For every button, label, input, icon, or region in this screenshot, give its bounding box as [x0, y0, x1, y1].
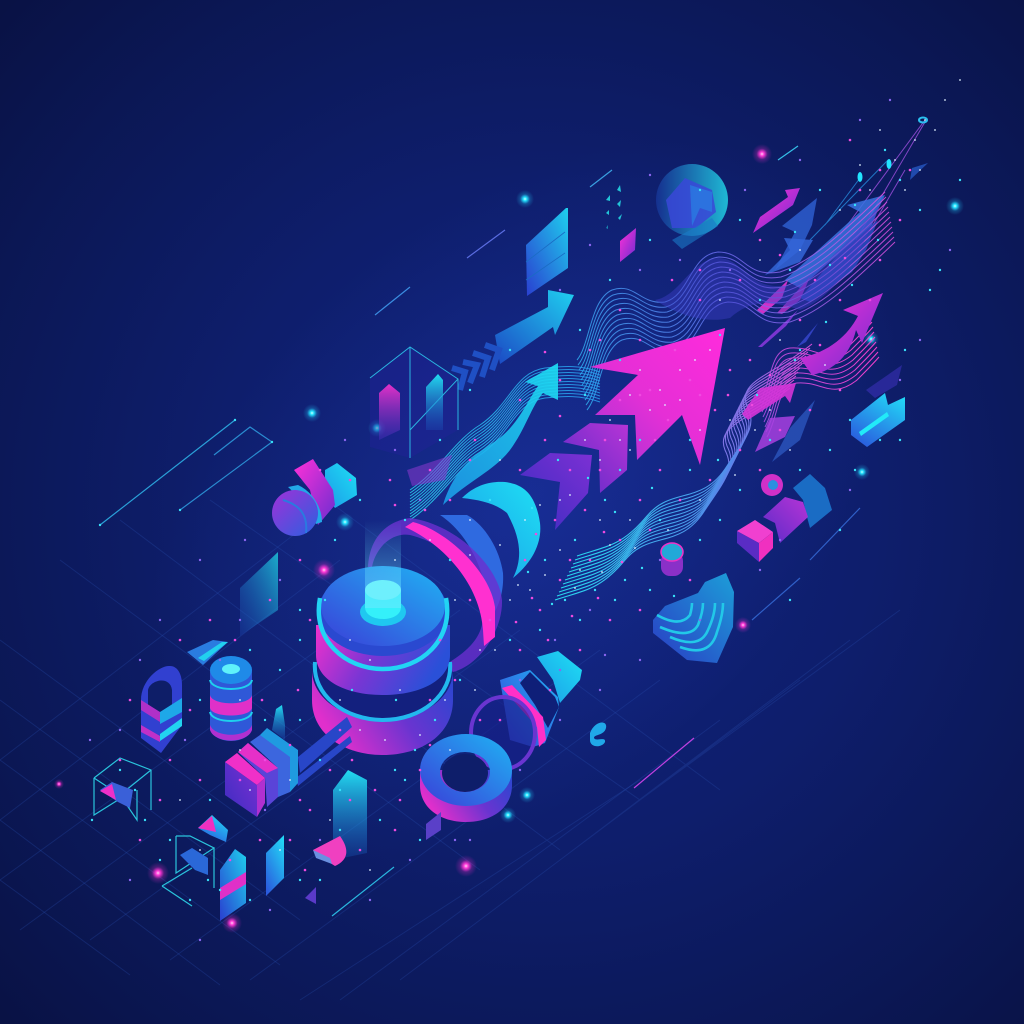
- hex sphere: [656, 164, 728, 249]
- wave: lower ribbon: [555, 344, 812, 600]
- wire cube left: [94, 758, 151, 820]
- pink band: [405, 522, 495, 646]
- cyan segment: [462, 482, 540, 578]
- wave: pink ribbon: [760, 322, 879, 437]
- arrow: large pink: [590, 328, 725, 465]
- donut: [420, 734, 512, 822]
- arrow: cyan large: [452, 290, 574, 390]
- wheel: rear segments: [368, 482, 540, 672]
- chevron: rear: [520, 453, 592, 530]
- stacked data cylinder: [312, 520, 453, 755]
- third layer: [250, 735, 290, 797]
- wave: left ribbon: [410, 367, 600, 520]
- barrel small: [661, 543, 683, 576]
- back layer: [260, 728, 298, 792]
- glass panel top: [526, 208, 568, 296]
- pink half disc: [313, 836, 346, 866]
- wave: upper ribbon: [577, 192, 895, 410]
- strip tall: [220, 849, 246, 921]
- spiral: [761, 474, 783, 496]
- pipes: [296, 717, 352, 786]
- pillar arrow: [333, 770, 367, 860]
- arch block: [141, 666, 182, 753]
- connector lines: [100, 146, 860, 916]
- flat tile: [187, 640, 228, 665]
- small tile bottom: [426, 812, 441, 840]
- second layer: [238, 743, 278, 807]
- particles: white: [180, 80, 960, 870]
- wave: upper ribbon fill: [655, 205, 880, 320]
- wire box with arrows: [370, 347, 458, 458]
- front layer: [225, 762, 257, 817]
- particles: violet: [90, 100, 950, 940]
- light column: [365, 590, 401, 619]
- small coil: [590, 723, 606, 746]
- horseshoe: [653, 573, 734, 663]
- gap between tiers: [316, 650, 450, 720]
- stacked cylinder small: [210, 656, 252, 741]
- light beam: [365, 520, 401, 608]
- layered blocks: [225, 705, 352, 817]
- light cap: [365, 580, 401, 600]
- arrow: pink curved: [800, 293, 883, 375]
- upper-right streaks toward tip: [810, 118, 928, 240]
- small triangle markers: [606, 185, 622, 229]
- chevron stripes: [452, 345, 499, 390]
- rhombus: [620, 228, 636, 262]
- small block with pink face: [198, 815, 228, 842]
- arrows: small lower right: [742, 383, 815, 462]
- cube: [737, 520, 773, 562]
- gadget right: [737, 474, 832, 562]
- strip slim: [266, 835, 284, 896]
- particles: cyan: [92, 150, 960, 900]
- light base: [360, 598, 406, 626]
- lower ring: [315, 662, 450, 720]
- chevron: front: [563, 423, 628, 493]
- cylinder: bottom right: [471, 651, 582, 769]
- wire cube bottom: [162, 836, 214, 906]
- gadget left: [272, 459, 357, 536]
- pink wave fragment: [407, 455, 452, 486]
- top disc face: [321, 566, 445, 646]
- glow dots: [54, 144, 964, 933]
- upper tier: [316, 625, 450, 695]
- triangle: [305, 887, 316, 904]
- purple ring: [368, 518, 502, 672]
- upper ring: [319, 598, 447, 669]
- lower tier: [312, 670, 453, 755]
- top disc: [318, 568, 448, 656]
- blue segment: [440, 515, 503, 620]
- box right: [851, 365, 905, 447]
- arrow: cyan curved: [443, 363, 558, 505]
- upper-right fading arrows: [753, 188, 885, 347]
- isometric floor grid: [0, 480, 900, 1000]
- particles: pink: [120, 140, 910, 870]
- glass panel left: [240, 552, 278, 636]
